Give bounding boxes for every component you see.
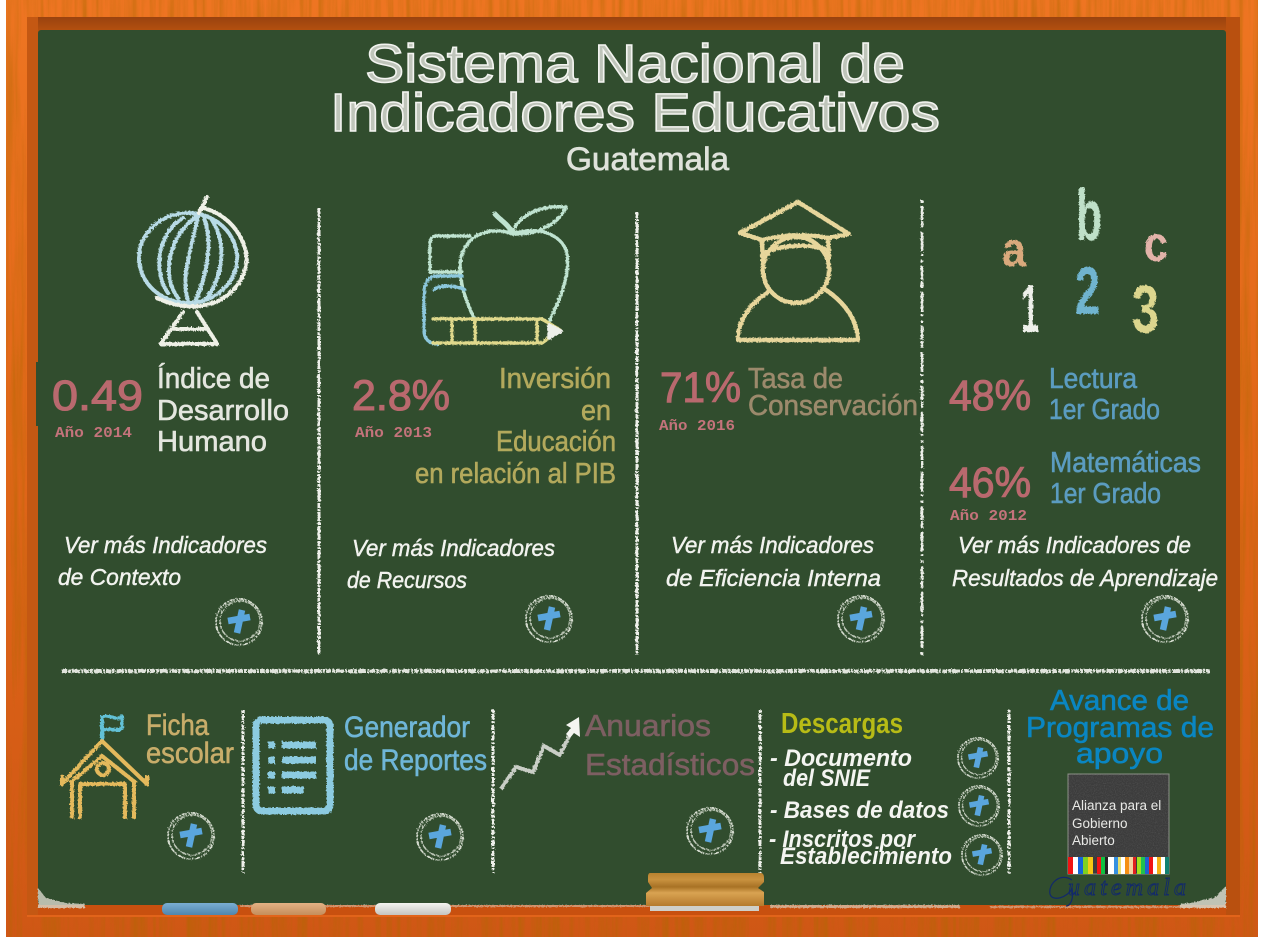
chalk sticks [162, 903, 451, 915]
year: 2016: Año 2016 [659, 418, 735, 435]
label: Índice de Desarrollo Humano: Humano [157, 426, 267, 458]
label: Tasa de Conservación: Tasa de [748, 363, 843, 395]
icon: chalk letters and numbers [1002, 176, 1168, 347]
label: Generador de Reportes [344, 711, 487, 777]
heading: Descargas: Descargas [781, 708, 903, 740]
year: 2012: Año 2012 [950, 508, 1027, 525]
icon: plus button [168, 813, 214, 859]
stat: 71%: 71% [660, 364, 741, 412]
label: Matemáticas 1er Grado [1050, 447, 1201, 510]
icon: chalk letters and numbers: 3 [1132, 271, 1159, 347]
stat: 0.49: 0.49 [52, 372, 143, 420]
panel: recursos [347, 207, 616, 642]
logo: Alianza para el Gobierno Abierto: Abierto [1072, 833, 1115, 848]
signature: Guatemala: uatemala [1068, 875, 1186, 901]
link text: resultados de aprendizaje [952, 532, 1218, 591]
icon: plus button [958, 738, 998, 778]
label: Índice de Desarrollo Humano: Índice de [157, 362, 270, 395]
link text: contexto: de Contexto [58, 564, 181, 590]
icon: globe [139, 197, 247, 344]
label: Inversión en Educación: en [581, 395, 611, 427]
icon: chalk letters and numbers: 1 [1021, 271, 1039, 347]
icon: plus button [417, 814, 463, 860]
title: Sistema Nacional de [365, 34, 905, 94]
panel: avance de programas [1026, 685, 1214, 906]
heading: Avance de Programas de apoyo: apoyo [1076, 738, 1163, 770]
link text: recursos: Ver más Indicadores [352, 535, 555, 561]
label: Índice de Desarrollo Humano [157, 362, 289, 458]
stat: 2.8%: 2.8% [352, 372, 450, 420]
icon: graduate [738, 202, 858, 340]
label: Ficha escolar: escolar [146, 737, 234, 770]
list: descargas: Establecimiento [780, 843, 952, 870]
label: Ficha escolar [146, 709, 234, 770]
tan chalk [251, 903, 326, 915]
label: Lectura 1er Grado [1049, 363, 1160, 426]
label: Anuarios Estadísticos: Estadísticos [585, 747, 755, 782]
heading: Avance de Programas de apoyo: Programas de [1026, 712, 1214, 744]
panel: anuarios estadísticos [501, 708, 755, 854]
label: Generador de Reportes: Generador [344, 711, 470, 744]
label: Inversión en Educación: Educación [496, 426, 616, 458]
link text: eficiencia interna [666, 532, 881, 591]
panel: ficha escolar [62, 709, 234, 859]
label: Generador de Reportes: de Reportes [344, 744, 487, 777]
label: Anuarios Estadísticos [585, 708, 755, 782]
link text: recursos [347, 535, 555, 593]
logo: Alianza para el Gobierno Abierto: Alianza para el [1072, 798, 1161, 813]
label: Tasa de Conservación [748, 363, 918, 422]
list: descargas [769, 745, 952, 870]
logo: Alianza para el Gobierno Abierto: Gobierno [1072, 816, 1128, 831]
label: Índice de Desarrollo Humano: Desarrollo [157, 395, 289, 427]
link text: resultados de aprendizaje: Resultados de Aprendizaje [952, 565, 1218, 591]
panel: contexto [52, 197, 289, 645]
logo: Alianza para el Gobierno Abierto [1068, 774, 1169, 874]
link text: contexto: Ver más Indicadores [64, 532, 267, 558]
list: descargas: del SNIE [783, 765, 871, 792]
link text: contexto [58, 532, 267, 590]
icon: plus button [526, 596, 572, 642]
icon: rising arrow [501, 717, 580, 789]
heading: Avance de Programas de apoyo [1026, 685, 1214, 770]
label: Inversión en Educación: Inversión [499, 363, 611, 395]
panel: generador de reportes [256, 711, 487, 860]
list: descargas: - Bases de datos [770, 797, 949, 824]
label: Matemáticas 1er Grado: Matemáticas [1050, 447, 1201, 479]
icon: plus button [687, 808, 733, 854]
panel: eficiencia interna [659, 202, 918, 642]
icon: plus button [1142, 596, 1188, 642]
icon: plus button [216, 599, 262, 645]
icon: chalk letters and numbers: a [1002, 224, 1026, 277]
label: Tasa de Conservación: Conservación [748, 390, 918, 422]
heading: Avance de Programas de apoyo: Avance de [1050, 685, 1189, 717]
eraser [646, 873, 764, 911]
white chalk [375, 903, 451, 915]
icon: chalk letters and numbers: 2 [1075, 253, 1100, 329]
column dividers [62, 200, 1210, 873]
title: Indicadores Educativos [330, 83, 940, 143]
icon: plus button [838, 596, 884, 642]
link text: recursos: de Recursos [347, 567, 467, 593]
subtitle: Guatemala [566, 141, 729, 177]
icon: chalk letters and numbers: b [1076, 176, 1102, 256]
label: Anuarios Estadísticos: Anuarios [585, 708, 711, 743]
stat: 46% matemáticas: 46% [949, 459, 1031, 507]
icon: plus button [962, 835, 1002, 875]
link text: resultados de aprendizaje: Ver más Indicadores de [958, 532, 1191, 558]
panel: descargas [769, 708, 1002, 875]
year: 2013: Año 2013 [355, 425, 432, 442]
label: Lectura 1er Grado: 1er Grado [1049, 394, 1160, 426]
list: descargas: - Documento [770, 745, 912, 772]
icon: school with flag [62, 716, 147, 819]
year: 2014: Año 2014 [55, 425, 132, 442]
icon: plus button [959, 786, 999, 826]
label: Ficha escolar: Ficha [146, 709, 209, 742]
icon: chalk letters and numbers: c [1144, 216, 1168, 272]
blue chalk [162, 903, 238, 915]
icon: apple, books and pencil [424, 207, 568, 344]
list: descargas: - Inscritos por [769, 826, 917, 853]
panel: resultados de aprendizaje [949, 176, 1218, 642]
chalk dust along tray [38, 886, 1226, 908]
icon: report sheet [256, 720, 330, 811]
link text: eficiencia interna: de Eficiencia Interna [666, 565, 881, 591]
link text: eficiencia interna: Ver más Indicadores [671, 532, 874, 558]
stat: 48% lectura: 48% [949, 372, 1031, 420]
label: Lectura 1er Grado: Lectura [1049, 363, 1138, 395]
label: Inversión en Educación [415, 363, 616, 490]
label: Inversión en Educación: en relación al PIB [415, 458, 616, 490]
label: Matemáticas 1er Grado: 1er Grado [1050, 478, 1161, 510]
title [330, 34, 940, 143]
